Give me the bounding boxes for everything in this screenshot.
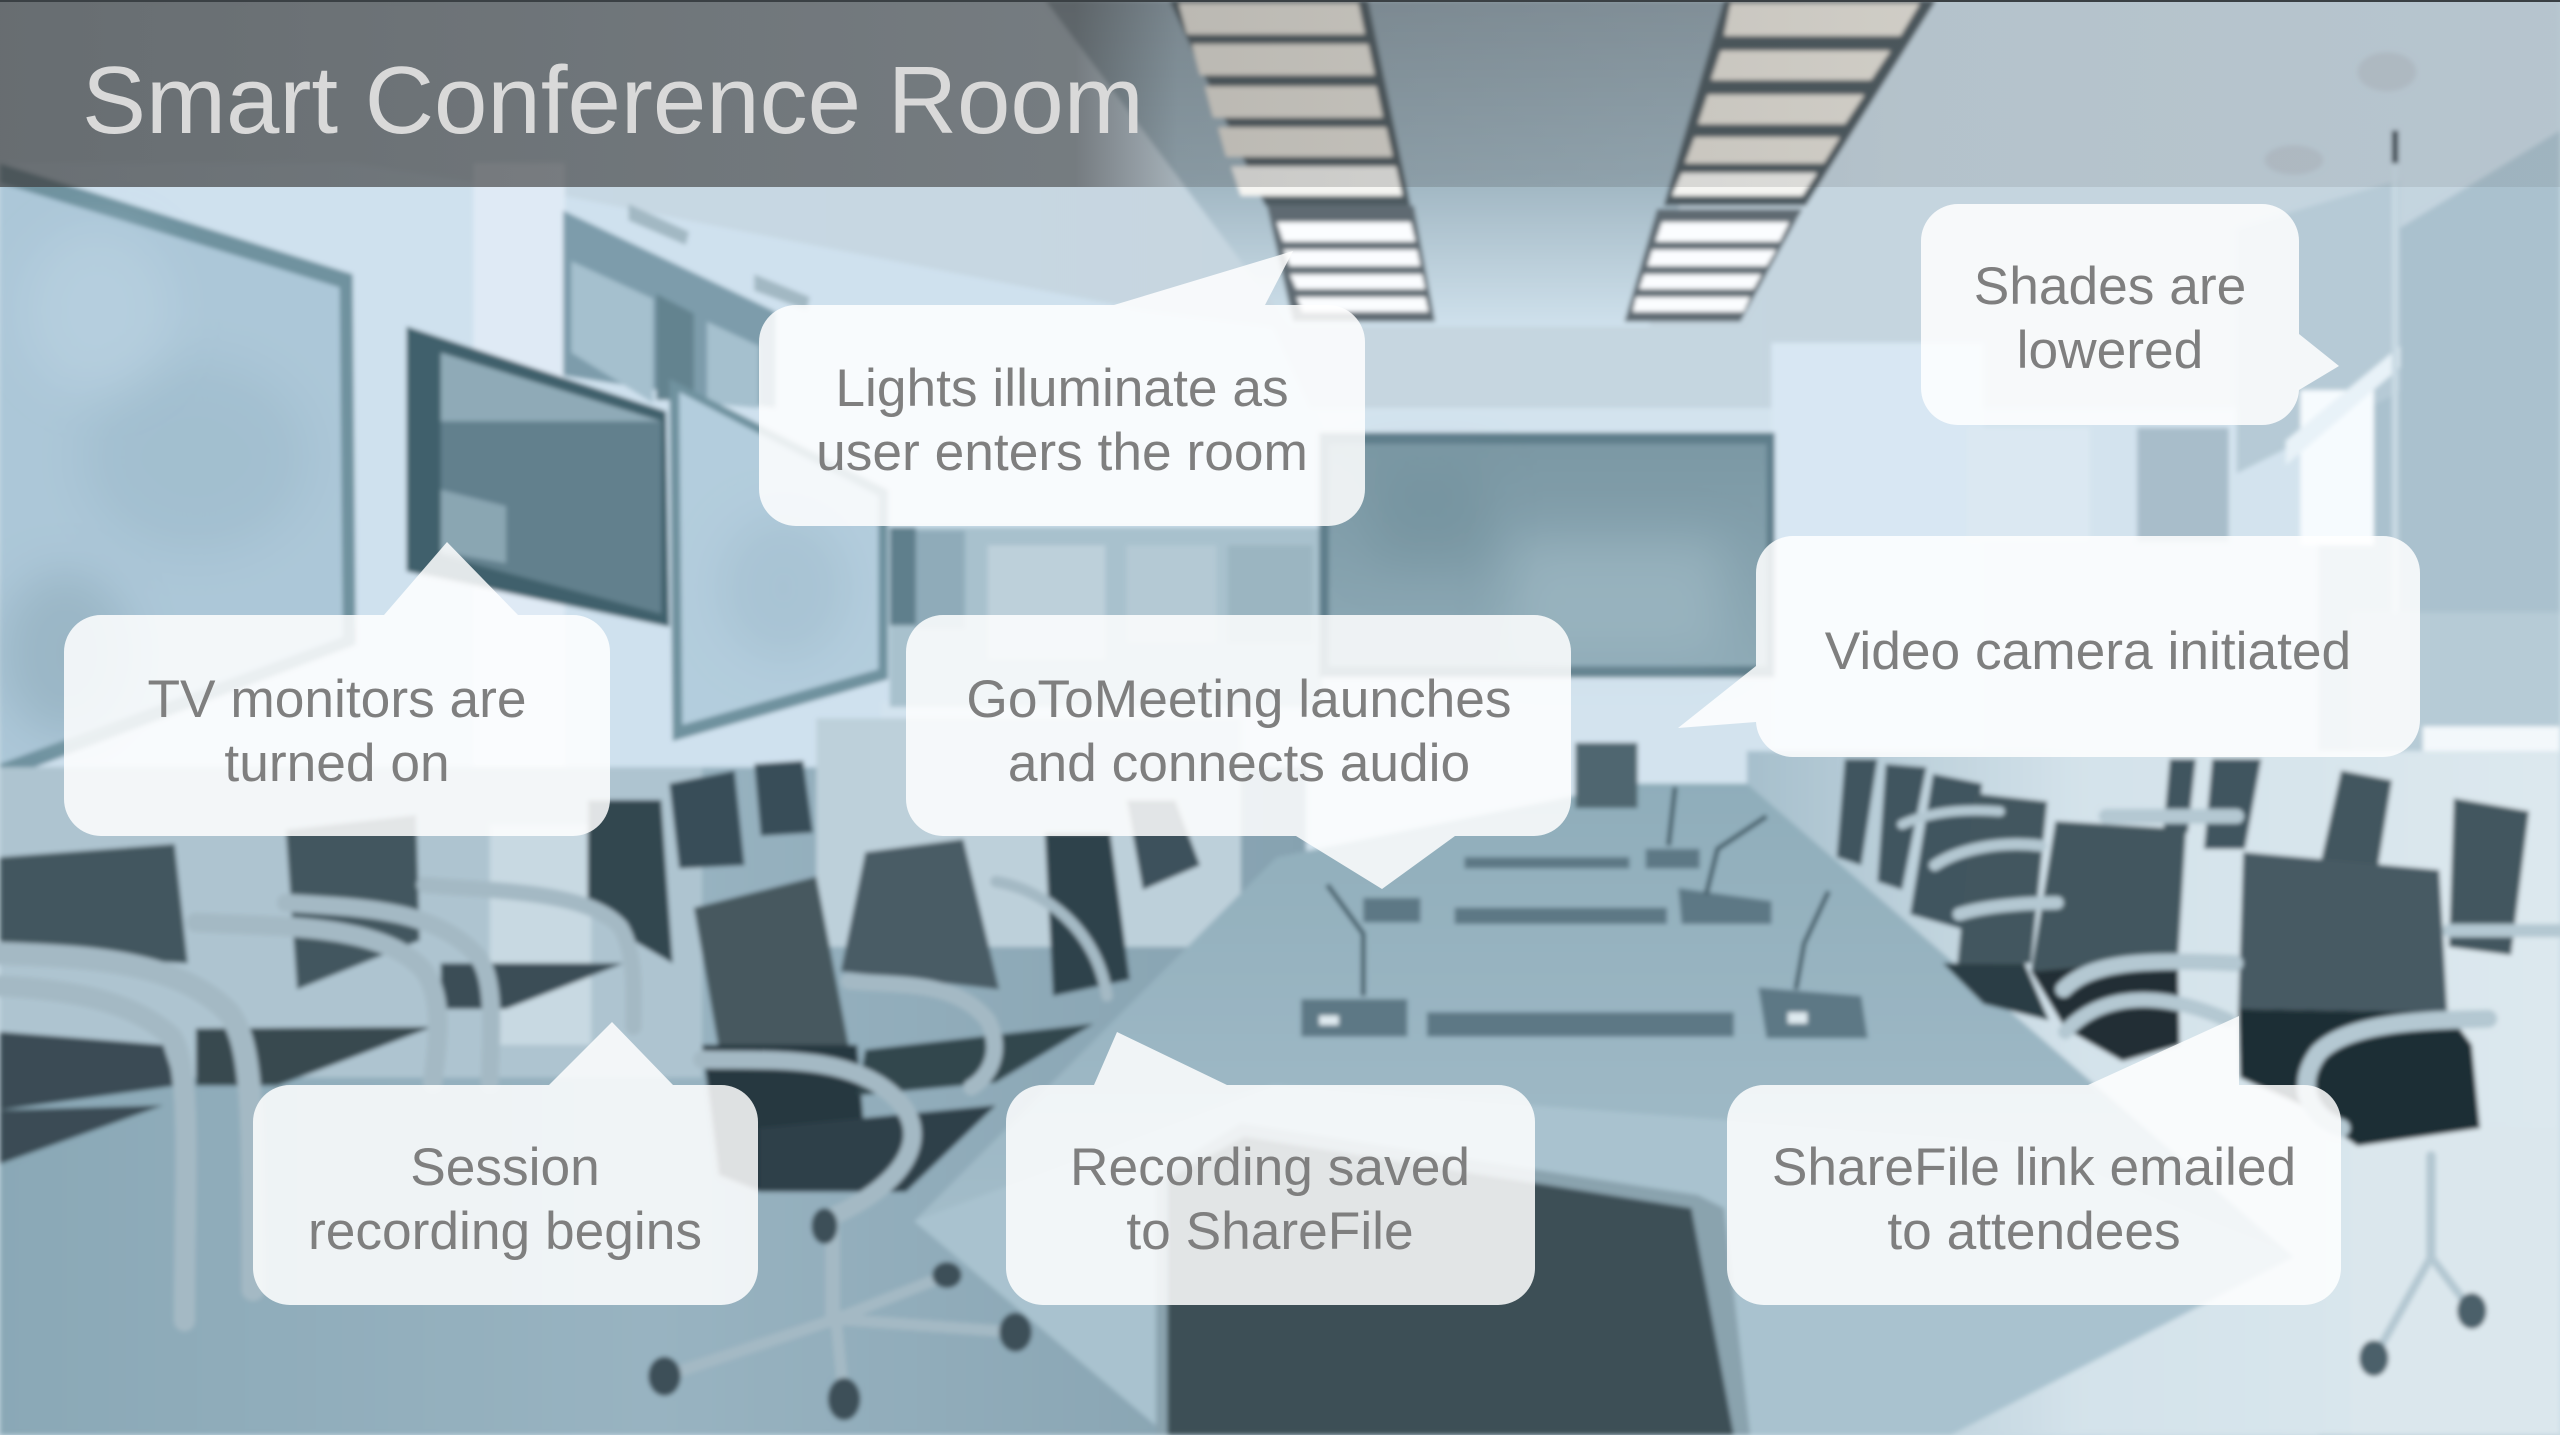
callout: recording saved to ShareFile — [1006, 1032, 1535, 1305]
callout: session recording begins: recording begins — [308, 1202, 702, 1261]
wall monitor — [407, 327, 669, 627]
callout: ShareFile link emailed: to attendees — [1887, 1202, 2181, 1261]
rear door frame on left wall — [563, 204, 810, 408]
conference table — [914, 784, 2294, 1435]
floor — [0, 718, 2560, 1435]
callout: video camera initiated — [1678, 536, 2420, 757]
callout: lights illuminate: Lights illuminate as — [835, 359, 1289, 418]
callout: video camera initiated: Video camera initiated — [1825, 622, 2351, 681]
table microphones and name plates — [1301, 743, 1868, 1038]
front chair back at end of table — [1156, 1123, 1750, 1435]
second whiteboard — [669, 379, 888, 741]
callout: shades lowered: Shades are — [1974, 257, 2246, 316]
callout: shades lowered: lowered — [2017, 321, 2203, 380]
callout: TV monitors turned on: turned on — [224, 734, 450, 793]
callout: ShareFile link emailed — [1727, 1016, 2341, 1305]
callout: lights illuminate — [759, 251, 1365, 526]
callout: recording saved to ShareFile: Recording saved — [1070, 1138, 1470, 1197]
title: Smart Conference Room — [82, 47, 1144, 154]
callout: TV monitors turned on: TV monitors are — [147, 670, 527, 729]
back wall projection screen — [1319, 433, 1775, 678]
callout: GoToMeeting launches: GoToMeeting launches — [966, 670, 1512, 729]
left wall whiteboard — [0, 163, 356, 780]
rear room doors — [890, 527, 1322, 707]
chairs on right side of table — [1837, 759, 2560, 1376]
callout: session recording begins — [253, 1022, 758, 1305]
callout: session recording begins: Session — [410, 1138, 600, 1197]
callout: ShareFile link emailed: ShareFile link emailed — [1772, 1138, 2296, 1197]
callout: GoToMeeting launches: and connects audio — [1008, 734, 1470, 793]
callout: GoToMeeting launches — [906, 615, 1571, 889]
callout: shades lowered — [1921, 204, 2339, 425]
callout: lights illuminate: user enters the room — [816, 423, 1308, 482]
callout: recording saved to ShareFile: to ShareFile — [1126, 1202, 1414, 1261]
callout: TV monitors turned on — [64, 542, 610, 836]
ceiling light panels — [1169, 0, 1936, 322]
chairs on left side of table — [0, 761, 1200, 1420]
